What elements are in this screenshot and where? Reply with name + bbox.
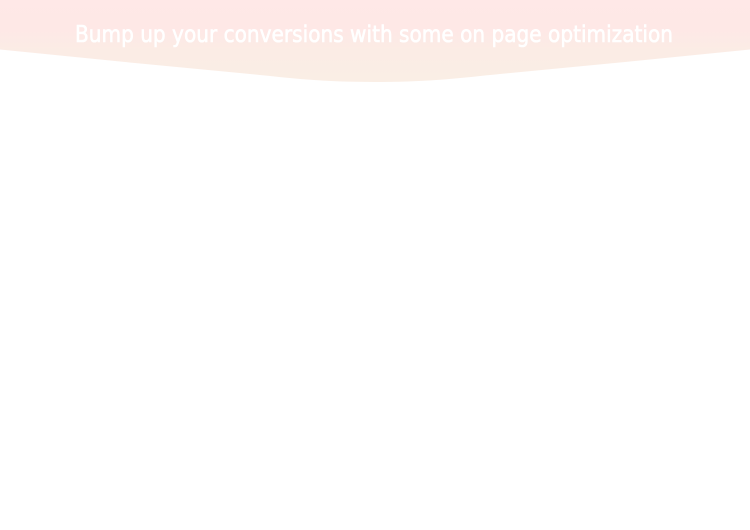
banner shape (0, 0, 750, 82)
title: Bump up your conversions with some on page optimization (75, 22, 673, 48)
